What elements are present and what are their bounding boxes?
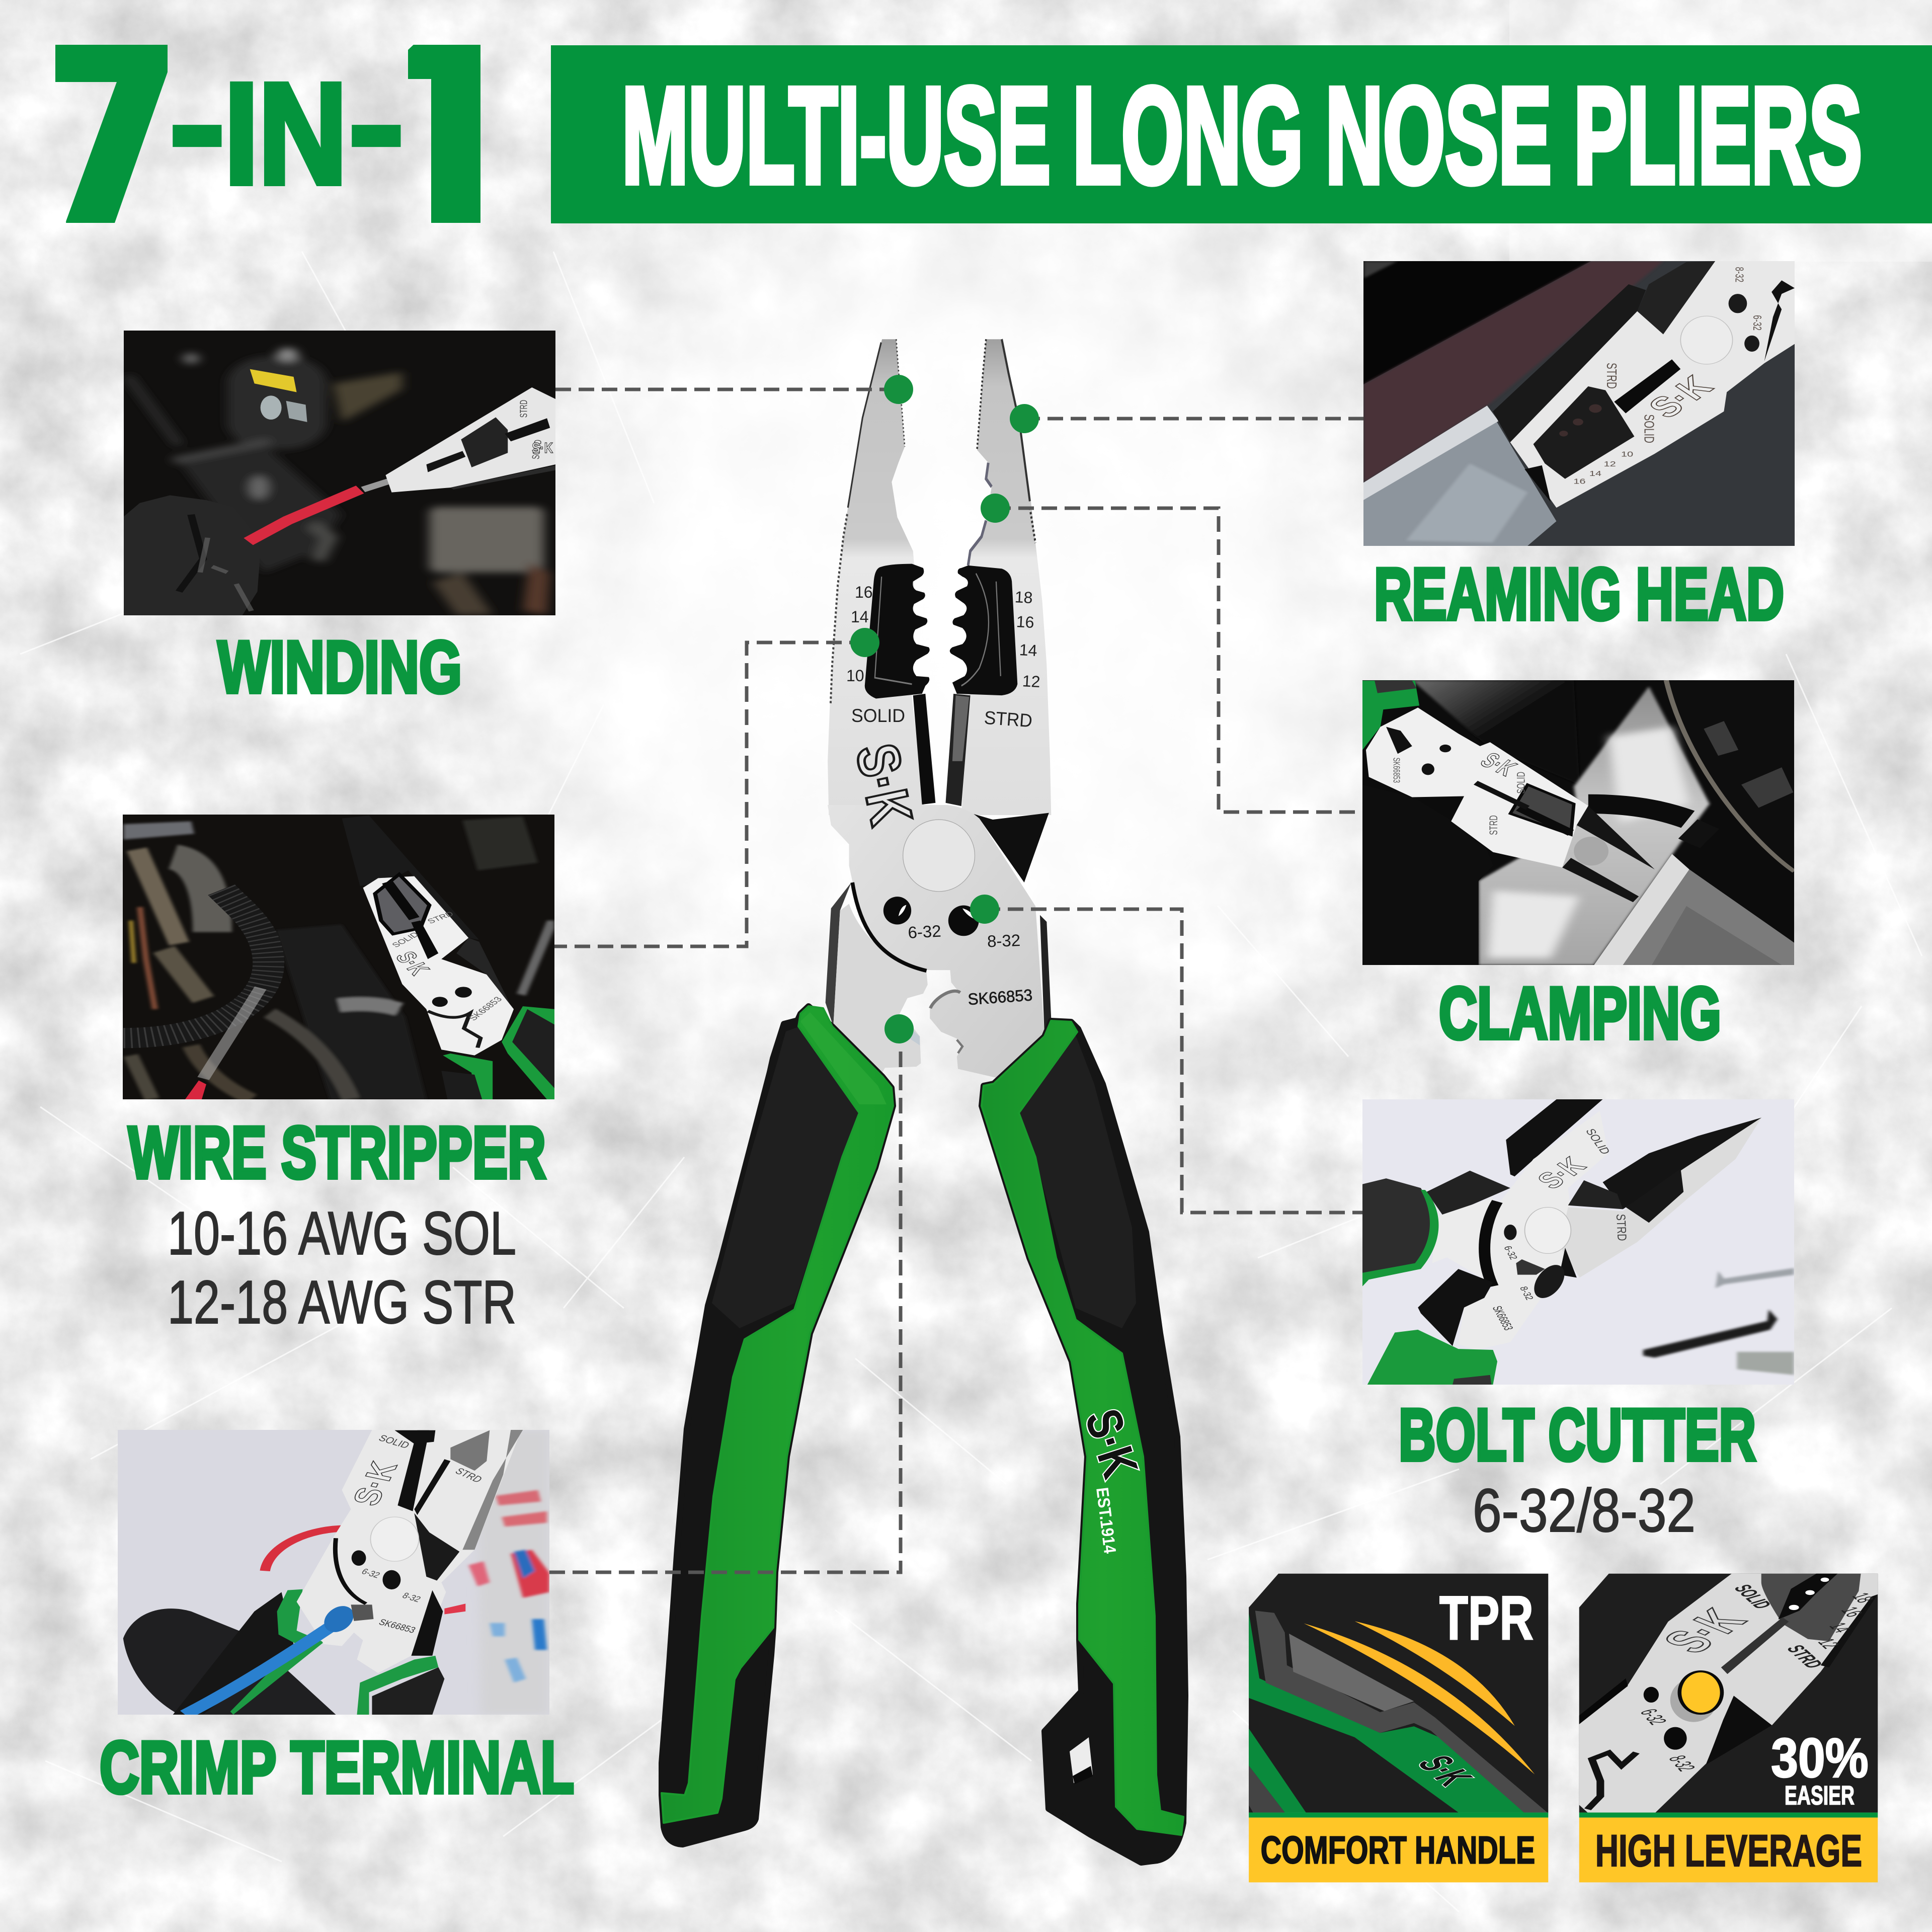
- connector: winding: [555, 387, 899, 391]
- right handle: [982, 1021, 1185, 1863]
- hyphen left: -: [169, 44, 225, 204]
- photo: wire stripper: S·K: [390, 948, 436, 978]
- photo: bolt cutter: S·K: [1531, 1153, 1592, 1194]
- title banner: [551, 45, 1932, 223]
- left handle: [662, 1006, 893, 1844]
- photo: winding: SOLID: [530, 439, 544, 459]
- photo: wire stripper: SK66853: [466, 995, 504, 1022]
- photo: winding: STRD: [518, 400, 529, 418]
- photo: wire stripper: SOLID: [390, 931, 421, 949]
- numeral 7: 7: [46, 0, 178, 276]
- panel: clamping: [1362, 680, 1794, 1054]
- badge: high leverage: STRD: [1782, 1643, 1828, 1670]
- connector: clamping: [995, 508, 1362, 812]
- badge: high leverage: 6-32: [1635, 1707, 1672, 1727]
- connector: crimp terminal: [549, 1052, 901, 1572]
- photo: clamping: S·K: [1475, 748, 1522, 780]
- badge: high leverage: 14: [1824, 1621, 1856, 1635]
- badge: high leverage: [1579, 1574, 1879, 1882]
- heading: winding: WINDING: [218, 626, 462, 708]
- photo: reaming head: 8-32: [1732, 267, 1745, 282]
- panel: winding: [124, 331, 555, 708]
- pliers product illustration: [662, 339, 1185, 1863]
- photo: reaming head: 10: [1621, 450, 1633, 458]
- photo: reaming head: STRD: [1604, 363, 1620, 389]
- photo: reaming head: S·K: [1640, 370, 1721, 424]
- numeral 1: 1: [401, 0, 497, 276]
- jaw gauge markings: 16: [1016, 612, 1034, 631]
- photo: bolt cutter: STRD: [1614, 1214, 1629, 1241]
- hyphen right: -: [348, 44, 405, 204]
- badge: high leverage: 8-32: [1664, 1753, 1701, 1773]
- handle text EST.1914: EST.1914: [1092, 1486, 1119, 1555]
- jaw gauge markings: 14: [851, 608, 869, 626]
- spec: solid gauge: 10-16 AWG SOL: [168, 1199, 516, 1267]
- panel: wire stripper: [123, 815, 554, 1336]
- photo: clamping: [1362, 680, 1794, 965]
- photo: crimp terminal: [118, 1430, 549, 1715]
- badge: high leverage: 16: [1836, 1604, 1868, 1619]
- jaw gauge markings: 12: [1022, 672, 1040, 691]
- photo: wire stripper: STRD: [426, 910, 455, 925]
- badge logo: S·K: [1651, 1602, 1759, 1659]
- photo: bolt cutter: SOLID: [1583, 1128, 1613, 1156]
- connector: bolt cutter: [985, 909, 1362, 1213]
- photo: clamping: STRD: [1487, 815, 1500, 835]
- jaw gauge markings: 18: [1014, 588, 1033, 607]
- lower metal body and pivot: 8-32: [987, 931, 1021, 950]
- photo: crimp terminal: STRD: [453, 1466, 485, 1485]
- photo: bolt cutter: 6-32: [1502, 1245, 1520, 1261]
- jaw gauge markings: 10: [846, 667, 864, 685]
- photo: reaming head: SOLID: [1642, 414, 1657, 443]
- jaw gauge markings: 16: [855, 583, 873, 601]
- photo: bolt cutter: [1362, 1099, 1794, 1385]
- jaw gauge markings: SOLID: [851, 705, 905, 726]
- photo: reaming head: 14: [1589, 469, 1601, 477]
- jaw section: [828, 339, 1052, 815]
- photo: crimp terminal: SOLID: [376, 1433, 412, 1451]
- lower metal body and pivot: 6-32: [908, 922, 941, 942]
- photo: wire stripper: [123, 815, 554, 1099]
- photo: reaming head: 6-32: [1750, 315, 1763, 331]
- badge: high leverage: SOLID: [1729, 1582, 1777, 1611]
- photo: crimp terminal: S·K: [345, 1458, 405, 1508]
- photo: reaming head: [1363, 261, 1795, 546]
- heading: clamping: CLAMPING: [1439, 972, 1721, 1054]
- photo: reaming head: 16: [1573, 477, 1585, 485]
- heading: wire stripper: WIRE STRIPPER: [128, 1111, 546, 1193]
- callout dots: [850, 375, 1039, 1043]
- letters IN: IN: [224, 54, 347, 214]
- panel: reaming head: [1363, 261, 1795, 635]
- lower metal body and pivot: SK66853: [967, 986, 1033, 1008]
- photo: crimp terminal: 8-32: [400, 1591, 423, 1604]
- connector: reaming head: [1024, 417, 1363, 421]
- panel: crimp terminal: [100, 1430, 574, 1808]
- badge: comfort handle: [1249, 1574, 1548, 1882]
- title badge: 7-IN-1: [55, 45, 480, 223]
- photo: reaming head: 12: [1604, 459, 1616, 468]
- panel: bolt cutter: [1362, 1099, 1794, 1545]
- feature badges: TPR: [1439, 1583, 1534, 1653]
- photo: clamping: SK66853: [1391, 758, 1401, 783]
- photo: crimp terminal: 6-32: [360, 1567, 382, 1580]
- badge: high leverage: 12: [1813, 1636, 1844, 1651]
- badge logo: S·K: [1407, 1751, 1483, 1790]
- jaw gauge markings: [846, 583, 1040, 731]
- lower metal body and pivot: [825, 805, 1052, 1078]
- spec: bolt sizes: 6-32/8-32: [1473, 1476, 1696, 1545]
- heading: bolt cutter: BOLT CUTTER: [1399, 1394, 1756, 1476]
- connector: wire stripper: [554, 642, 865, 946]
- photo: clamping: SOLID: [1515, 772, 1527, 794]
- feature badges: [1249, 1574, 1879, 1882]
- spec: stranded gauge: 12-18 AWG STR: [168, 1268, 516, 1336]
- photo: winding: [124, 331, 555, 615]
- heading: crimp terminal: CRIMP TERMINAL: [100, 1726, 574, 1808]
- engraved S·K logo: S·K: [843, 738, 925, 831]
- photo: bolt cutter: 8-32: [1517, 1285, 1536, 1301]
- handle logo S·K: S·K: [1074, 1402, 1149, 1484]
- photo: crimp terminal: SK66853: [377, 1617, 418, 1635]
- jaw gauge markings: 14: [1019, 640, 1037, 660]
- jaw gauge markings: STRD: [984, 707, 1033, 731]
- photo: bolt cutter: SK66853: [1490, 1305, 1516, 1331]
